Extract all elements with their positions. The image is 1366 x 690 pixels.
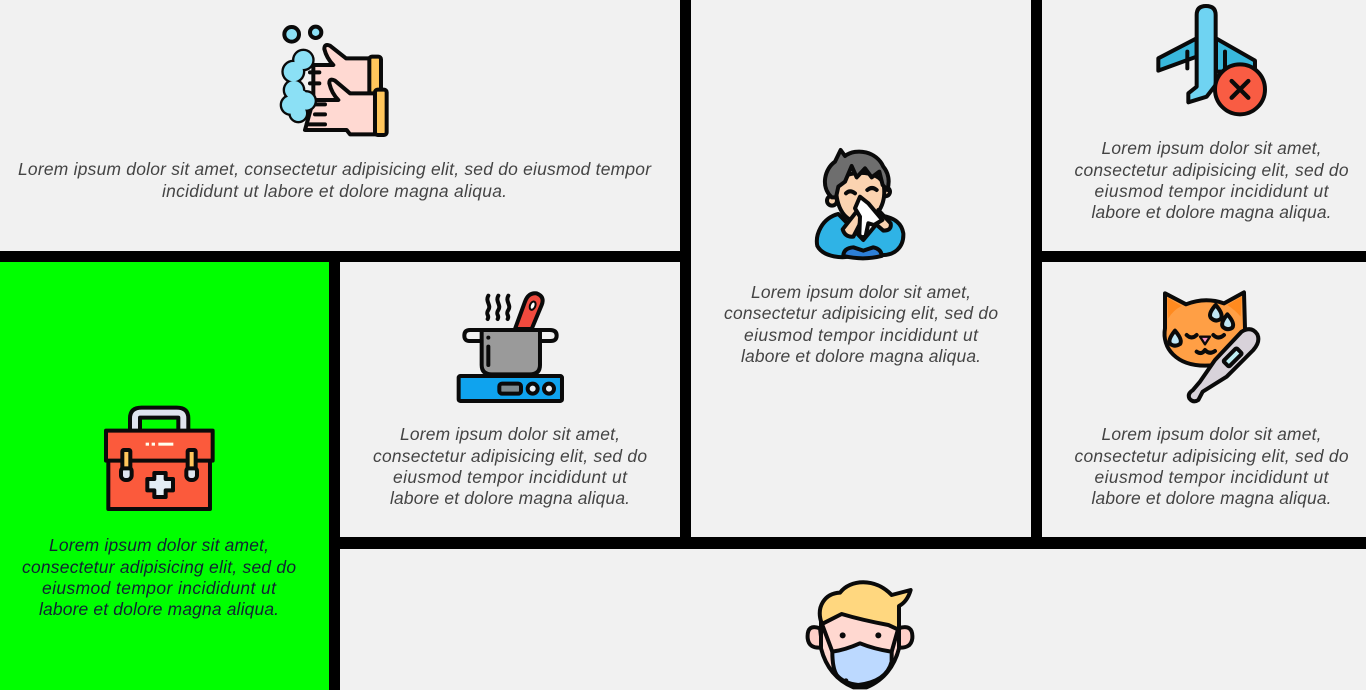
text: cooking xyxy=(373,424,647,508)
icon: plane with cross xyxy=(1158,6,1265,114)
text: cancelled flight: consectetur adipisicing elit, sed do xyxy=(1074,160,1349,180)
icon: cooking pot xyxy=(459,293,562,401)
icon: child with tissue xyxy=(817,150,903,258)
panel: first aid xyxy=(0,262,329,690)
panel: hand washing xyxy=(0,0,680,251)
text: cooking: consectetur adipisicing elit, sed do xyxy=(373,446,647,466)
text: hand washing: incididunt ut labore et dolore magna aliqua. xyxy=(162,181,507,201)
text: sick cat: consectetur adipisicing elit, sed do xyxy=(1074,446,1349,466)
text: sick cat xyxy=(1074,424,1349,508)
text: sick cat: labore et dolore magna aliqua. xyxy=(1092,488,1332,508)
text: cooking: labore et dolore magna aliqua. xyxy=(390,488,630,508)
icon: first aid kit xyxy=(106,408,213,509)
text: sneezing child: consectetur adipisicing elit, sed do xyxy=(724,303,998,323)
text: sick cat: eiusmod tempor incididunt ut xyxy=(1094,467,1330,487)
text: sneezing child: eiusmod tempor incididunt ut xyxy=(744,325,979,345)
panel: cancelled flight xyxy=(1042,0,1366,251)
icon: man with mask xyxy=(808,582,912,687)
text: cancelled flight: labore et dolore magna aliqua. xyxy=(1092,202,1332,222)
text: cooking: eiusmod tempor incididunt ut xyxy=(393,467,628,487)
text: first aid: consectetur adipisicing elit, sed do xyxy=(22,557,296,577)
text: first aid: labore et dolore magna aliqua. xyxy=(39,599,279,619)
text: cancelled flight: Lorem ipsum dolor sit amet, xyxy=(1102,138,1322,158)
text: first aid: Lorem ipsum dolor sit amet, xyxy=(49,535,269,555)
icon: cat with thermometer xyxy=(1165,292,1258,401)
text: sick cat: Lorem ipsum dolor sit amet, xyxy=(1102,424,1322,444)
text: hand washing: Lorem ipsum dolor sit amet, consectetur adipisicing elit, sed do eiusmod tempor xyxy=(18,159,652,179)
text: cancelled flight xyxy=(1074,138,1349,222)
text: hand washing xyxy=(18,159,652,201)
text: first aid: eiusmod tempor incididunt ut xyxy=(42,578,277,598)
panel: sneezing child xyxy=(691,0,1031,537)
text: cancelled flight: eiusmod tempor incididunt ut xyxy=(1094,181,1330,201)
text: first aid xyxy=(22,535,296,619)
panel: cooking xyxy=(340,262,680,537)
text: sneezing child: Lorem ipsum dolor sit amet, xyxy=(751,282,971,302)
icon: washing hands xyxy=(282,27,387,135)
panel: face mask xyxy=(340,549,1366,690)
text: sneezing child: labore et dolore magna aliqua. xyxy=(741,346,981,366)
text: sneezing child xyxy=(724,282,998,366)
text: cooking: Lorem ipsum dolor sit amet, xyxy=(400,424,620,444)
panel: sick cat xyxy=(1042,262,1366,537)
